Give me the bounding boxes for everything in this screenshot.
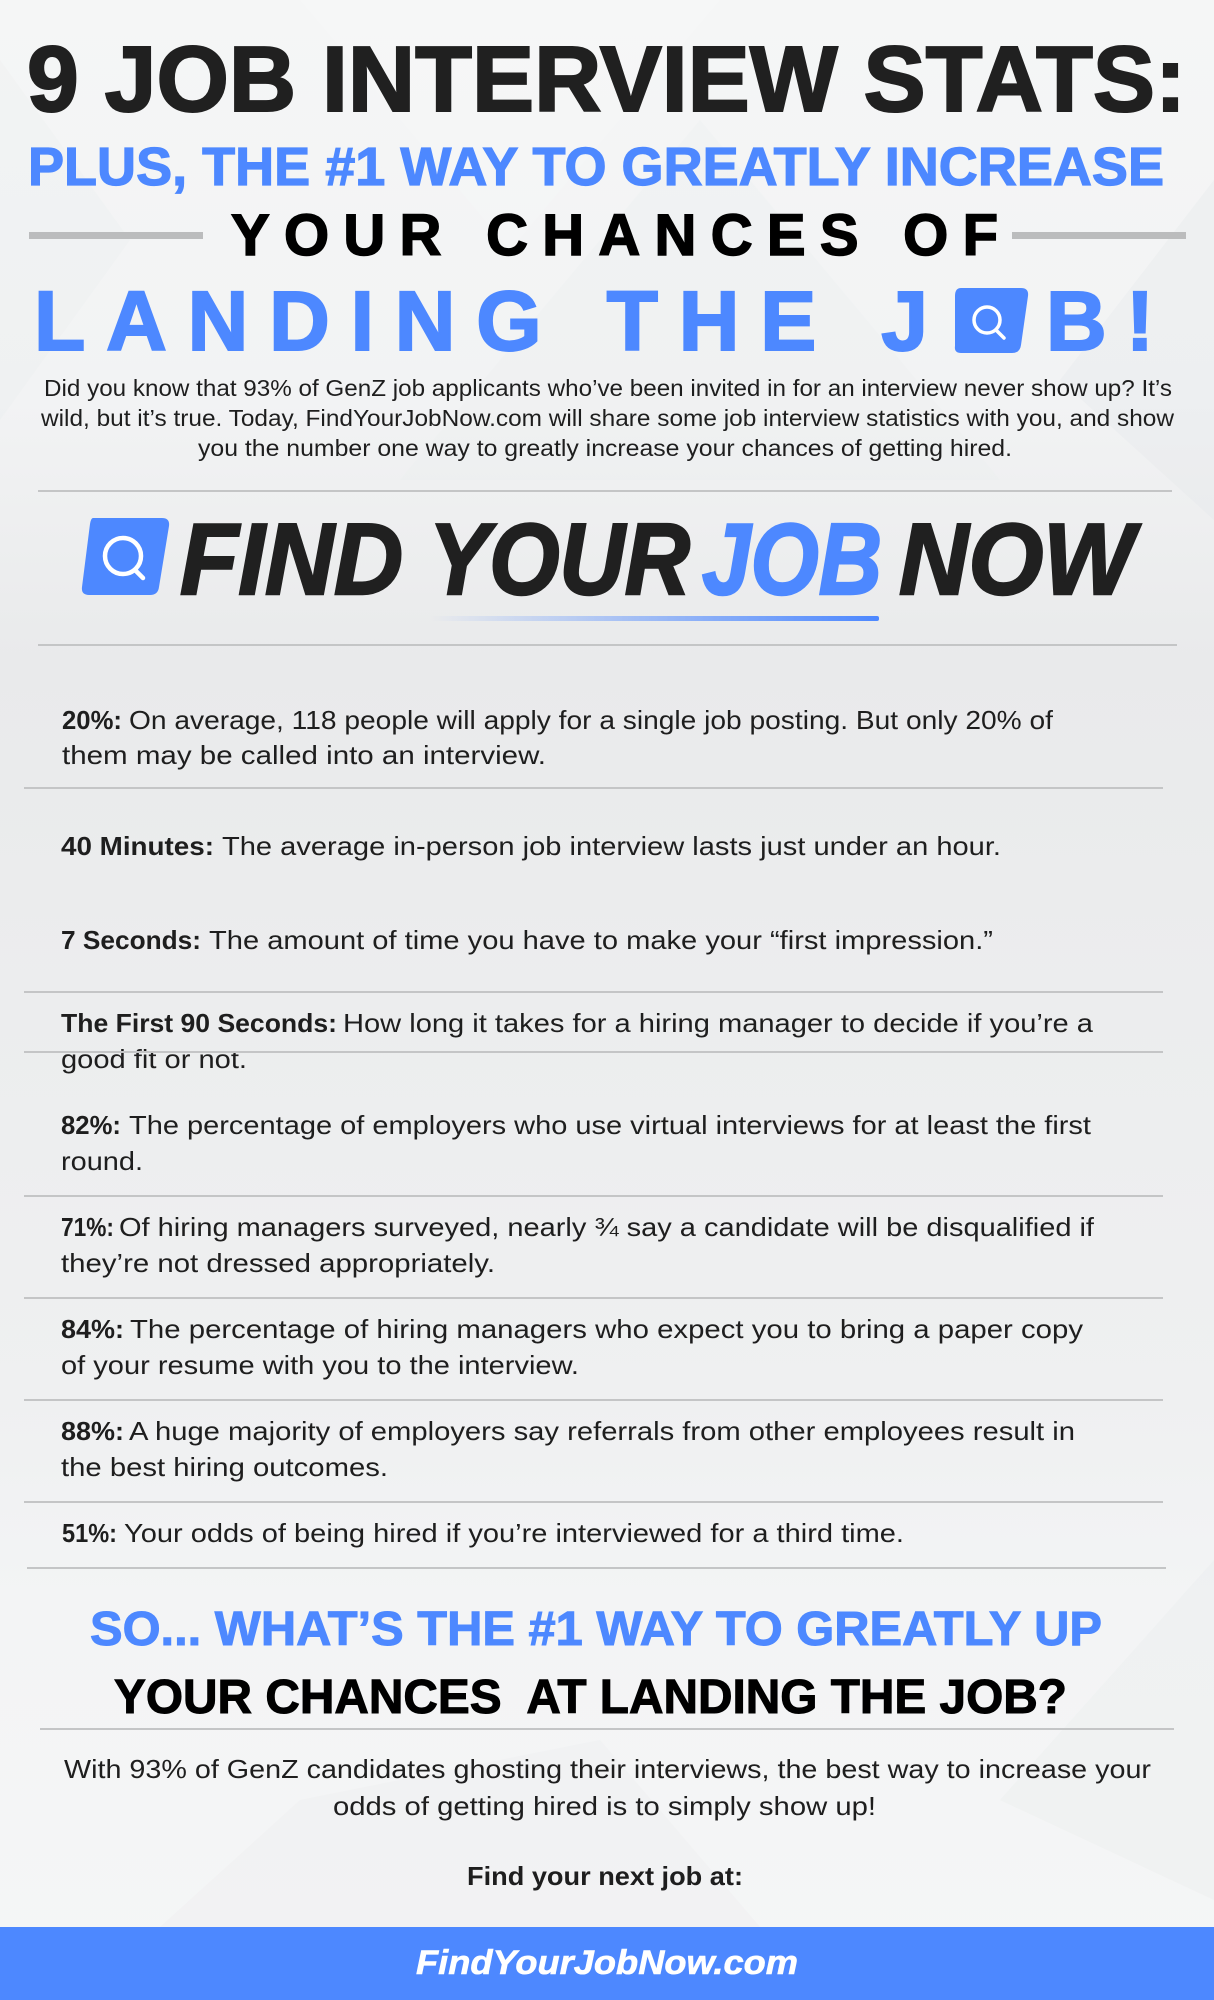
stat: 20%: On average, 118 people will apply for a single job posting. But only 20% of xyxy=(129,705,1054,735)
closing paragraph: With 93% of GenZ candidates ghosting their interviews, the best way to increase your xyxy=(64,1754,1151,1784)
footer band xyxy=(0,1927,1214,2000)
stat: 84% xyxy=(61,1314,1083,1380)
stat: first 90 seconds xyxy=(61,1008,1094,1074)
stat: 88% xyxy=(61,1416,1075,1482)
subtitle: landing the job: LANDING THE J xyxy=(34,274,928,368)
intro paragraph: Did you know that 93% of GenZ job applicants who’ve been invited in for an interview never show up? It’s xyxy=(44,375,1172,401)
stat: 84%: of your resume with you to the interview. xyxy=(61,1350,579,1380)
stat: 84%: The percentage of hiring managers who expect you to bring a paper copy xyxy=(130,1314,1083,1344)
stat: 71%: Of hiring managers surveyed, nearly ¾ say a candidate will be disqualified if xyxy=(119,1212,1095,1242)
stat: 20%: 20%: xyxy=(62,705,122,735)
stat: 71%: they’re not dressed appropriately. xyxy=(61,1248,495,1278)
logo: find your job now: YOUR xyxy=(429,504,690,616)
call to action: Find your next job at: xyxy=(467,1861,743,1891)
stat: 88%: the best hiring outcomes. xyxy=(61,1452,388,1482)
stat: 51%: 51%: xyxy=(62,1518,117,1548)
stat: 84%: 84%: xyxy=(61,1314,124,1344)
stat: 82%: 82%: xyxy=(61,1110,121,1140)
closing heading xyxy=(90,1603,1102,1724)
logo underline xyxy=(430,616,879,621)
stat: 40 minutes: The average in-person job interview lasts just under an hour. xyxy=(222,831,1001,861)
logo: find your job now xyxy=(82,504,1141,621)
logo: find your job now: NOW xyxy=(899,504,1141,616)
stat: 7 seconds: 7 Seconds: xyxy=(61,925,201,955)
stat: 51%: Your odds of being hired if you’re interviewed for a third time. xyxy=(124,1518,904,1548)
title: 9 JOB INTERVIEW STATS: xyxy=(27,27,1186,131)
intro paragraph: wild, but it’s true. Today, FindYourJobNow.com will share some job interview statistics with you, and show xyxy=(40,405,1175,431)
stat: 82%: The percentage of employers who use virtual interviews for at least the first xyxy=(129,1110,1092,1140)
stat: first 90 seconds: How long it takes for a hiring manager to decide if you’re a xyxy=(343,1008,1094,1038)
stat: first 90 seconds: good fit or not. xyxy=(61,1044,247,1074)
stat: 40 minutes: 40 Minutes: xyxy=(61,831,214,861)
stat: 88%: A huge majority of employers say referrals from other employees result in xyxy=(129,1416,1075,1446)
footer band: FindYourJobNow.com xyxy=(416,1944,798,1982)
closing paragraph: odds of getting hired is to simply show up! xyxy=(333,1791,876,1821)
icon: search square xyxy=(955,288,1028,353)
subtitle: your chances of xyxy=(29,203,1186,268)
stat: 20%: them may be called into an interview. xyxy=(62,740,546,770)
subtitle: landing the job: ! xyxy=(1126,274,1154,368)
stat: 82%: round. xyxy=(61,1146,143,1176)
stat: 88%: 88%: xyxy=(61,1416,124,1446)
closing paragraph xyxy=(64,1754,1151,1821)
stat: first 90 seconds: The First 90 Seconds: xyxy=(61,1008,337,1038)
subtitle: plus: PLUS, THE #1 WAY TO GREATLY INCREASE xyxy=(28,137,1164,197)
intro paragraph xyxy=(40,375,1175,461)
subtitle: landing the job: B xyxy=(1046,274,1107,368)
icon: logo search square xyxy=(82,518,169,595)
subtitle: your chances of: YOUR CHANCES OF xyxy=(231,203,998,268)
logo: find your job now: FIND xyxy=(180,504,403,616)
stat: 20% xyxy=(62,705,1054,770)
intro paragraph: you the number one way to greatly increase your chances of getting hired. xyxy=(198,435,1012,461)
closing heading: SO... WHAT’S THE #1 WAY TO GREATLY UP xyxy=(90,1603,1102,1656)
logo: find your job now: JOB xyxy=(702,504,882,616)
stat: 71% xyxy=(61,1212,1095,1278)
stat: 71%: 71%: xyxy=(61,1212,114,1242)
stat: 82% xyxy=(61,1110,1092,1176)
closing heading: YOUR CHANCES AT LANDING THE JOB? xyxy=(114,1671,1067,1724)
stat: 7 seconds: The amount of time you have to make your “first impression.” xyxy=(209,925,993,955)
